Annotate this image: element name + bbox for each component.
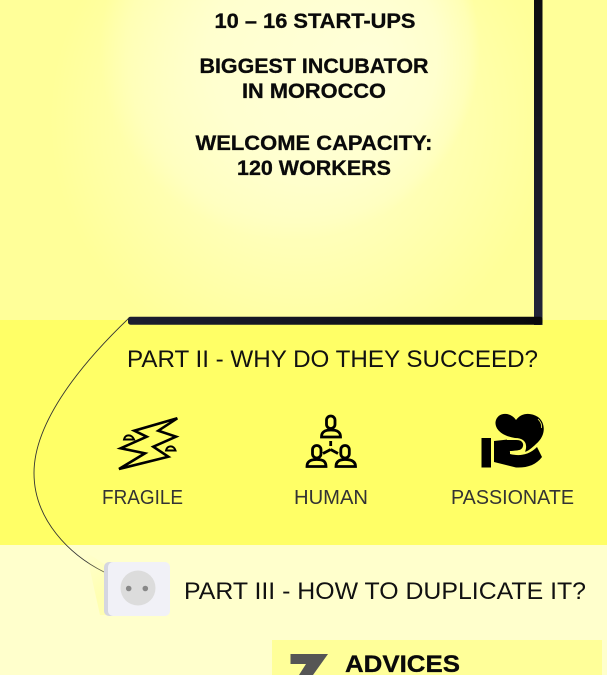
label: fragile: FRAGILE — [102, 487, 183, 509]
icon: human network — [307, 416, 356, 466]
panel: part II background — [0, 320, 607, 545]
panel: part III background — [0, 545, 607, 675]
text: incubator facts: WELCOME CAPACITY: — [196, 132, 432, 155]
cable to socket — [34, 318, 129, 572]
text: incubator facts: IN MOROCCO — [242, 80, 386, 103]
text: incubator facts: 10 – 16 START-UPS — [214, 10, 416, 33]
icon: hand holding heart — [482, 414, 544, 468]
number seven — [290, 654, 328, 675]
panel: advices — [272, 640, 602, 675]
frame: dark vertical and horizontal bars — [128, 0, 542, 325]
text: incubator facts: BIGGEST INCUBATOR — [200, 55, 428, 78]
person: left — [307, 446, 326, 466]
label: human: HUMAN — [294, 487, 368, 509]
heading: part III: PART III - HOW TO DUPLICATE IT? — [184, 578, 586, 605]
person: top — [322, 416, 340, 437]
icon: fragile broken lightning — [119, 418, 177, 469]
text: incubator facts: 120 WORKERS — [237, 157, 391, 180]
person: right — [336, 446, 356, 466]
label: passionate: PASSIONATE — [451, 487, 574, 509]
heading: part II: PART II - WHY DO THEY SUCCEED? — [127, 346, 538, 373]
icon: wall socket — [86, 552, 170, 616]
text: incubator facts — [196, 10, 432, 180]
panel: incubator facts background — [0, 0, 607, 370]
